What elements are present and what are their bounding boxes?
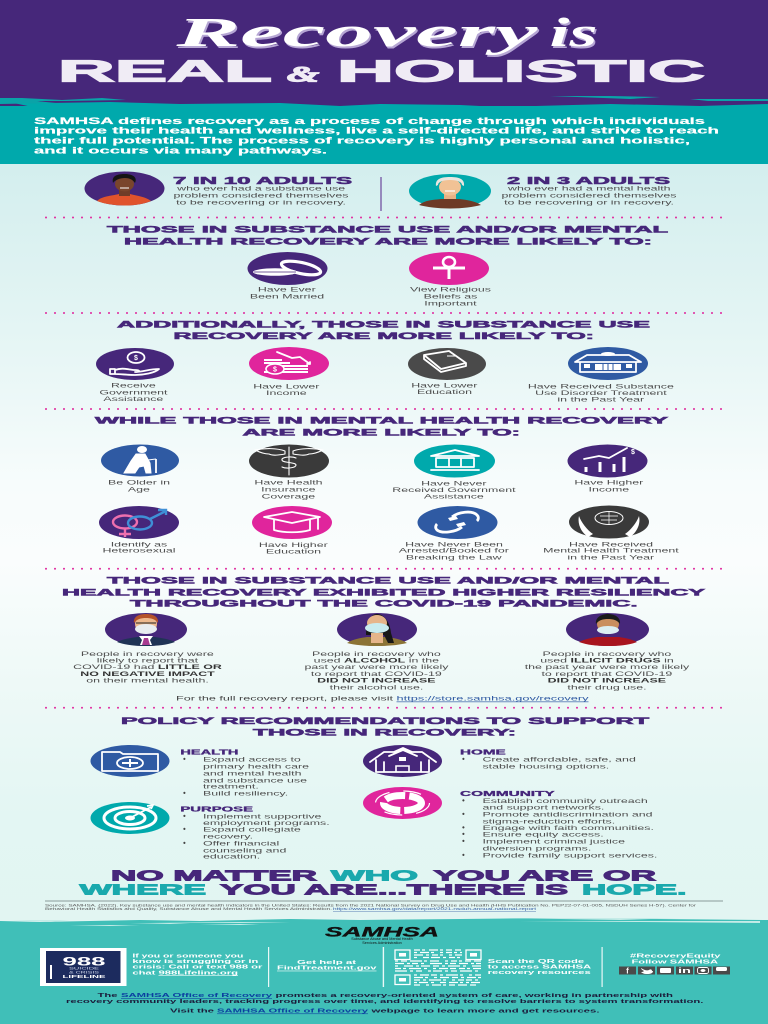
label: Have Higher — [574, 479, 644, 487]
heading: WHILE THOSE IN MENTAL HEALTH RECOVERY — [95, 416, 668, 426]
crisis help text: chat — [132, 970, 156, 976]
closing message: WHERE — [80, 882, 206, 898]
policy: home: Create affordable, safe, and — [482, 756, 636, 763]
crisis help text: know is struggling or in — [132, 959, 259, 965]
policy: health: Build resiliency. — [203, 790, 288, 797]
policy: health: • — [183, 754, 186, 764]
policy: community: Promote antidiscrimination and — [482, 811, 653, 818]
label — [399, 541, 510, 562]
label: Have Ever — [258, 286, 317, 294]
policy: purpose: Expand collegiate — [203, 826, 301, 833]
divider: stats — [380, 177, 382, 211]
label: Have Received Substance — [528, 383, 674, 391]
icon: hand with coin: $ — [134, 355, 138, 362]
988 lifeline logo: SUICIDE — [69, 966, 100, 970]
label: Have Lower — [253, 383, 320, 391]
label: View Religious — [410, 286, 491, 294]
policy: home — [460, 750, 636, 770]
office of recovery statement: The — [98, 993, 118, 999]
office of recovery statement: SAMHSA Office of Recovery — [217, 1008, 370, 1014]
text: used ALCOHOL in the — [314, 657, 440, 665]
label: Education — [266, 548, 321, 556]
title line: Real and Holistic: REAL — [58, 54, 272, 88]
full report link — [176, 696, 590, 702]
policy: purpose: • — [183, 825, 186, 834]
label — [543, 541, 679, 562]
title line: Recovery is — [174, 9, 599, 57]
intro paragraph — [34, 116, 719, 156]
icon: graduation cap — [252, 506, 332, 539]
icon: wedding rings — [248, 252, 328, 285]
policy: purpose: Implement supportive — [203, 813, 322, 820]
heading: THOSE IN RECOVERY: — [253, 728, 516, 738]
policy: community: Engage with faith communities. — [482, 825, 654, 832]
page background — [0, 160, 768, 930]
icon: treatment building — [568, 347, 648, 380]
heading: THOSE IN SUBSTANCE USE AND/OR MENTAL — [107, 224, 669, 234]
label: Important — [424, 300, 477, 308]
988 lifeline logo — [40, 948, 126, 986]
icon: brain in hands — [569, 506, 649, 538]
label — [254, 479, 323, 501]
title line: Recovery is: is — [550, 9, 598, 55]
SAMHSA logo: SAMHSA — [325, 924, 439, 940]
source note: Behavioral Health Statistics and Quality, Substance Abuse and Mental Health Services Administration. — [45, 907, 332, 911]
policy: health: • — [183, 788, 186, 798]
stat description: who ever had a mental health — [507, 185, 671, 192]
label: Education — [417, 389, 472, 396]
policy: community: Ensure equity access. — [482, 831, 604, 838]
label: Have Lower — [411, 382, 478, 390]
label: Assistance — [103, 396, 164, 403]
crisis help text: crisis: Call or text 988 or — [132, 965, 264, 971]
label — [259, 542, 329, 556]
footer band — [0, 918, 768, 1024]
text: NO NEGATIVE IMPACT — [80, 671, 215, 678]
label — [102, 541, 176, 555]
icon: ankh — [409, 252, 489, 285]
policy: community: • — [462, 823, 465, 832]
text: People in recovery who — [312, 651, 441, 658]
title line: Recovery is: is — [551, 11, 599, 57]
label — [99, 382, 168, 403]
icon: handcuffs — [418, 506, 498, 539]
title line: Real and Holistic: & — [287, 62, 319, 86]
text: used ILLICIT DRUGS in — [540, 657, 674, 665]
icon: older person — [101, 444, 179, 476]
header banner — [0, 0, 768, 164]
heading — [95, 416, 668, 438]
label: Received Government — [392, 487, 516, 494]
intro paragraph: SAMHSA defines recovery as a process of change through which individuals — [34, 116, 705, 126]
policy: purpose: • — [183, 812, 186, 820]
text — [73, 651, 222, 685]
panel: covid-19 resiliency — [62, 576, 705, 702]
label: Receive — [111, 382, 156, 390]
text: the past year were more likely — [525, 664, 689, 671]
label: Have Received — [569, 541, 653, 549]
social block — [619, 954, 730, 976]
heading: ADDITIONALLY, THOSE IN SUBSTANCE USE — [117, 320, 650, 330]
QR caption: to access SAMHSA — [488, 964, 591, 970]
title line: Recovery is: Recovery — [176, 11, 541, 57]
label: Government — [99, 389, 168, 397]
QR code — [395, 950, 481, 985]
text: People in recovery who — [542, 651, 672, 658]
avatar: woman — [84, 172, 164, 206]
find treatment — [277, 960, 378, 972]
heading: RECOVERY ARE MORE LIKELY TO: — [174, 331, 594, 341]
heading — [121, 716, 650, 738]
policy: purpose: employment programs. — [203, 820, 330, 827]
policy: health: primary health care — [203, 763, 310, 770]
label — [574, 479, 644, 494]
stat description: problem considered themselves — [502, 192, 676, 199]
policy: community: Establish community outreach — [482, 798, 648, 805]
policy: purpose — [180, 806, 330, 860]
stat description: to be recovering or in recovery. — [176, 199, 346, 206]
social icons — [619, 966, 730, 976]
label: in the Past Year — [557, 396, 645, 404]
heading — [117, 320, 650, 341]
policy: community: • — [462, 796, 465, 805]
text: to report that COVID-19 — [541, 671, 673, 678]
office of recovery statement — [66, 993, 704, 1014]
QR caption: recovery resources — [488, 970, 591, 976]
heading: THROUGHOUT THE COVID-19 PANDEMIC. — [130, 598, 638, 608]
label — [411, 382, 478, 396]
policy: community: diversion programs. — [482, 845, 591, 852]
policy: purpose: Offer financial — [203, 840, 279, 847]
stat description — [174, 185, 348, 206]
label: Arrested/Booked for — [399, 547, 510, 555]
policy: health: and substance use — [203, 777, 308, 784]
SAMHSA logo: Services Administration — [362, 941, 402, 945]
icon: caduceus — [249, 444, 329, 478]
intro paragraph: their full potential. The process of recovery is highly personal and holistic, — [34, 136, 690, 146]
full report link: https://store.samhsa.gov/recovery — [396, 696, 590, 702]
social icons: f — [626, 966, 629, 976]
title line: Recovery is: Recovery — [174, 9, 539, 55]
label: Have Never — [421, 480, 487, 488]
avatar: masked woman 2 — [566, 613, 649, 646]
icon: bank — [414, 444, 495, 478]
policy: health: treatment. — [203, 783, 259, 790]
source note: https://www.samhsa.gov/data/report/2021-nsduh-annual-national-report — [333, 907, 538, 911]
title — [58, 9, 705, 88]
heading: HEALTH RECOVERY ARE MORE LIKELY TO: — [124, 236, 652, 246]
intro paragraph: improve their health and wellness, live a self-directed life, and strive to reach — [34, 126, 719, 136]
label: Mental Health Treatment — [543, 547, 679, 555]
policy: community: Provide family support services. — [482, 852, 657, 859]
social block: #RecoveryEquity — [630, 954, 722, 960]
icon: falling income: $ — [273, 366, 277, 374]
label: Income — [589, 486, 630, 494]
panel: mental health recovery — [95, 416, 679, 562]
label: Coverage — [261, 493, 316, 501]
SAMHSA logo: Substance Abuse and Mental Health — [351, 937, 413, 941]
find treatment: FindTreatment.gov — [277, 966, 378, 972]
icon: falling income — [249, 347, 329, 380]
label — [250, 286, 324, 301]
policy: community: • — [462, 836, 465, 846]
closing message: YOU ARE OR — [434, 868, 656, 884]
office of recovery statement: Visit the — [170, 1008, 214, 1014]
policy: purpose: • — [183, 838, 186, 848]
label: Income — [266, 390, 307, 397]
SAMHSA logo — [325, 924, 439, 945]
label: Been Married — [250, 293, 324, 301]
find treatment: Get help at — [297, 960, 356, 966]
label — [108, 479, 170, 494]
heading — [62, 576, 705, 608]
label — [528, 383, 674, 404]
label: in the Past Year — [567, 554, 655, 562]
avatar: masked woman — [337, 613, 417, 646]
text: to report that COVID-19 — [311, 671, 442, 678]
text — [305, 651, 448, 692]
footer dividers — [268, 947, 603, 987]
text: likely to report that — [97, 657, 198, 665]
stat: 2 in 3 adults — [409, 174, 676, 208]
label: Age — [128, 486, 150, 494]
policy: community: • — [462, 850, 465, 860]
heading: THOSE IN SUBSTANCE USE AND/OR MENTAL — [107, 576, 670, 586]
policy: community: Implement criminal justice — [482, 838, 626, 845]
intro paragraph: and it occurs via many pathways. — [34, 146, 327, 156]
988 lifeline logo: & CRISIS — [69, 970, 100, 974]
panel: policy recommendations — [90, 716, 657, 860]
icon: health folder — [90, 745, 170, 777]
social icons: in — [678, 966, 692, 975]
label: Assistance — [424, 493, 484, 501]
social block: Follow SAMHSA — [632, 959, 718, 965]
policy: purpose: PURPOSE — [180, 806, 254, 813]
stat description: problem considered themselves — [174, 192, 348, 199]
policy: health: and mental health — [203, 770, 302, 777]
office of recovery statement: webpage to learn more and get resources. — [370, 1008, 600, 1014]
closing message — [80, 868, 687, 898]
crisis help text: 988Lifeline.org — [158, 970, 239, 976]
label: Breaking the Law — [406, 554, 503, 562]
icon: target — [90, 802, 170, 834]
QR caption — [488, 959, 591, 976]
policy: community: stigma-reduction efforts. — [482, 818, 615, 825]
heading: HEALTH RECOVERY EXHIBITED HIGHER RESILIENCY — [62, 588, 705, 598]
label: Insurance — [261, 486, 316, 494]
heading — [107, 224, 669, 246]
text: People in recovery were — [81, 651, 214, 658]
icon: rising chart — [568, 444, 648, 478]
closing message: NO MATTER — [111, 868, 317, 884]
988 lifeline logo: 988 — [62, 954, 106, 968]
closing message: WHO — [331, 868, 419, 884]
policy: purpose: counseling and — [203, 847, 286, 854]
source note — [45, 900, 723, 911]
icon: book — [408, 348, 486, 380]
source note: Source: SAMHSA. (2022). Key substance use and mental health indicators in the United States: Results from the 2021 National Survey on Drug Use and Health (HHS Publication No. PEP22-07-01-005, NSDUH Series H-57). Center for — [45, 904, 697, 908]
text: COVID-19 had LITTLE OR — [73, 664, 222, 671]
crisis help text — [132, 954, 264, 976]
office of recovery statement: recovery community leaders, tracking progress over time, and identifying to resolve barriers to system transformation. — [66, 999, 704, 1005]
text: DID NOT INCREASE — [317, 677, 436, 685]
policy: community: • — [462, 830, 465, 838]
policy: purpose: recovery. — [203, 833, 253, 840]
label — [392, 480, 516, 501]
closing message: YOU ARE...THERE IS — [220, 882, 568, 898]
text: on their mental health. — [86, 677, 209, 685]
988 lifeline logo: LIFELINE — [62, 974, 106, 979]
crisis help text: If you or someone you — [132, 954, 244, 960]
full report link: For the full recovery report, please visit — [176, 696, 393, 702]
policy: health — [180, 750, 310, 798]
heading: POLICY RECOMMENDATIONS TO SUPPORT — [121, 716, 650, 726]
icon: house — [363, 745, 442, 777]
policy: health: Expand access to — [203, 756, 301, 763]
policy: home: stable housing options. — [482, 763, 609, 770]
label: Be Older in — [108, 479, 170, 487]
closing message: HOPE. — [582, 882, 686, 898]
stat description — [502, 185, 676, 206]
label: Have Higher — [259, 542, 329, 549]
heading: ARE MORE LIKELY TO: — [242, 428, 520, 438]
label — [253, 383, 320, 397]
stat: 7 in 10 adults — [84, 172, 353, 206]
title line: Real and Holistic: HOLISTIC — [337, 54, 705, 88]
icon: hand with coin — [96, 348, 174, 380]
text: DID NOT INCREASE — [548, 677, 667, 685]
label: Heterosexual — [102, 547, 176, 555]
label: Identify as — [111, 541, 167, 549]
QR caption: Scan the QR code — [488, 959, 584, 965]
icon: gender symbols — [99, 506, 179, 539]
label: Have Never Been — [405, 541, 503, 549]
panel: more likely to (both) — [107, 224, 669, 308]
label: Have Health — [254, 479, 323, 487]
policy: purpose: education. — [203, 853, 260, 860]
policy: community: and support networks. — [482, 804, 604, 811]
text: past year were more likely — [305, 664, 448, 671]
label — [410, 286, 491, 308]
text: their drug use. — [567, 684, 647, 692]
label: Beliefs as — [424, 293, 477, 301]
avatar: masked man — [105, 613, 187, 646]
stat description: to be recovering or in recovery. — [504, 199, 674, 206]
policy: community: • — [462, 810, 465, 818]
stat heading: 7 IN 10 ADULTS — [173, 176, 353, 187]
policy: home: • — [462, 754, 465, 764]
icon: rising chart: $ — [631, 449, 635, 456]
avatar: older man — [409, 174, 491, 208]
icon: community circle — [363, 787, 442, 819]
stat heading: 2 IN 3 ADULTS — [507, 176, 671, 187]
text: their alcohol use. — [330, 684, 423, 692]
policy: community: COMMUNITY — [460, 791, 555, 798]
policy: home: HOME — [460, 750, 506, 757]
panel: substance use recovery — [96, 320, 674, 404]
office of recovery statement: SAMHSA Office of Recovery — [121, 993, 274, 999]
stat description: who ever had a substance use — [176, 185, 346, 192]
policy: community — [460, 791, 657, 860]
office of recovery statement: promotes a recovery-oriented system of care, working in partnership with — [276, 993, 674, 999]
policy: health: HEALTH — [180, 750, 238, 757]
title line: Real and Holistic — [58, 54, 705, 88]
label: Use Disorder Treatment — [535, 390, 667, 397]
text — [525, 651, 689, 692]
